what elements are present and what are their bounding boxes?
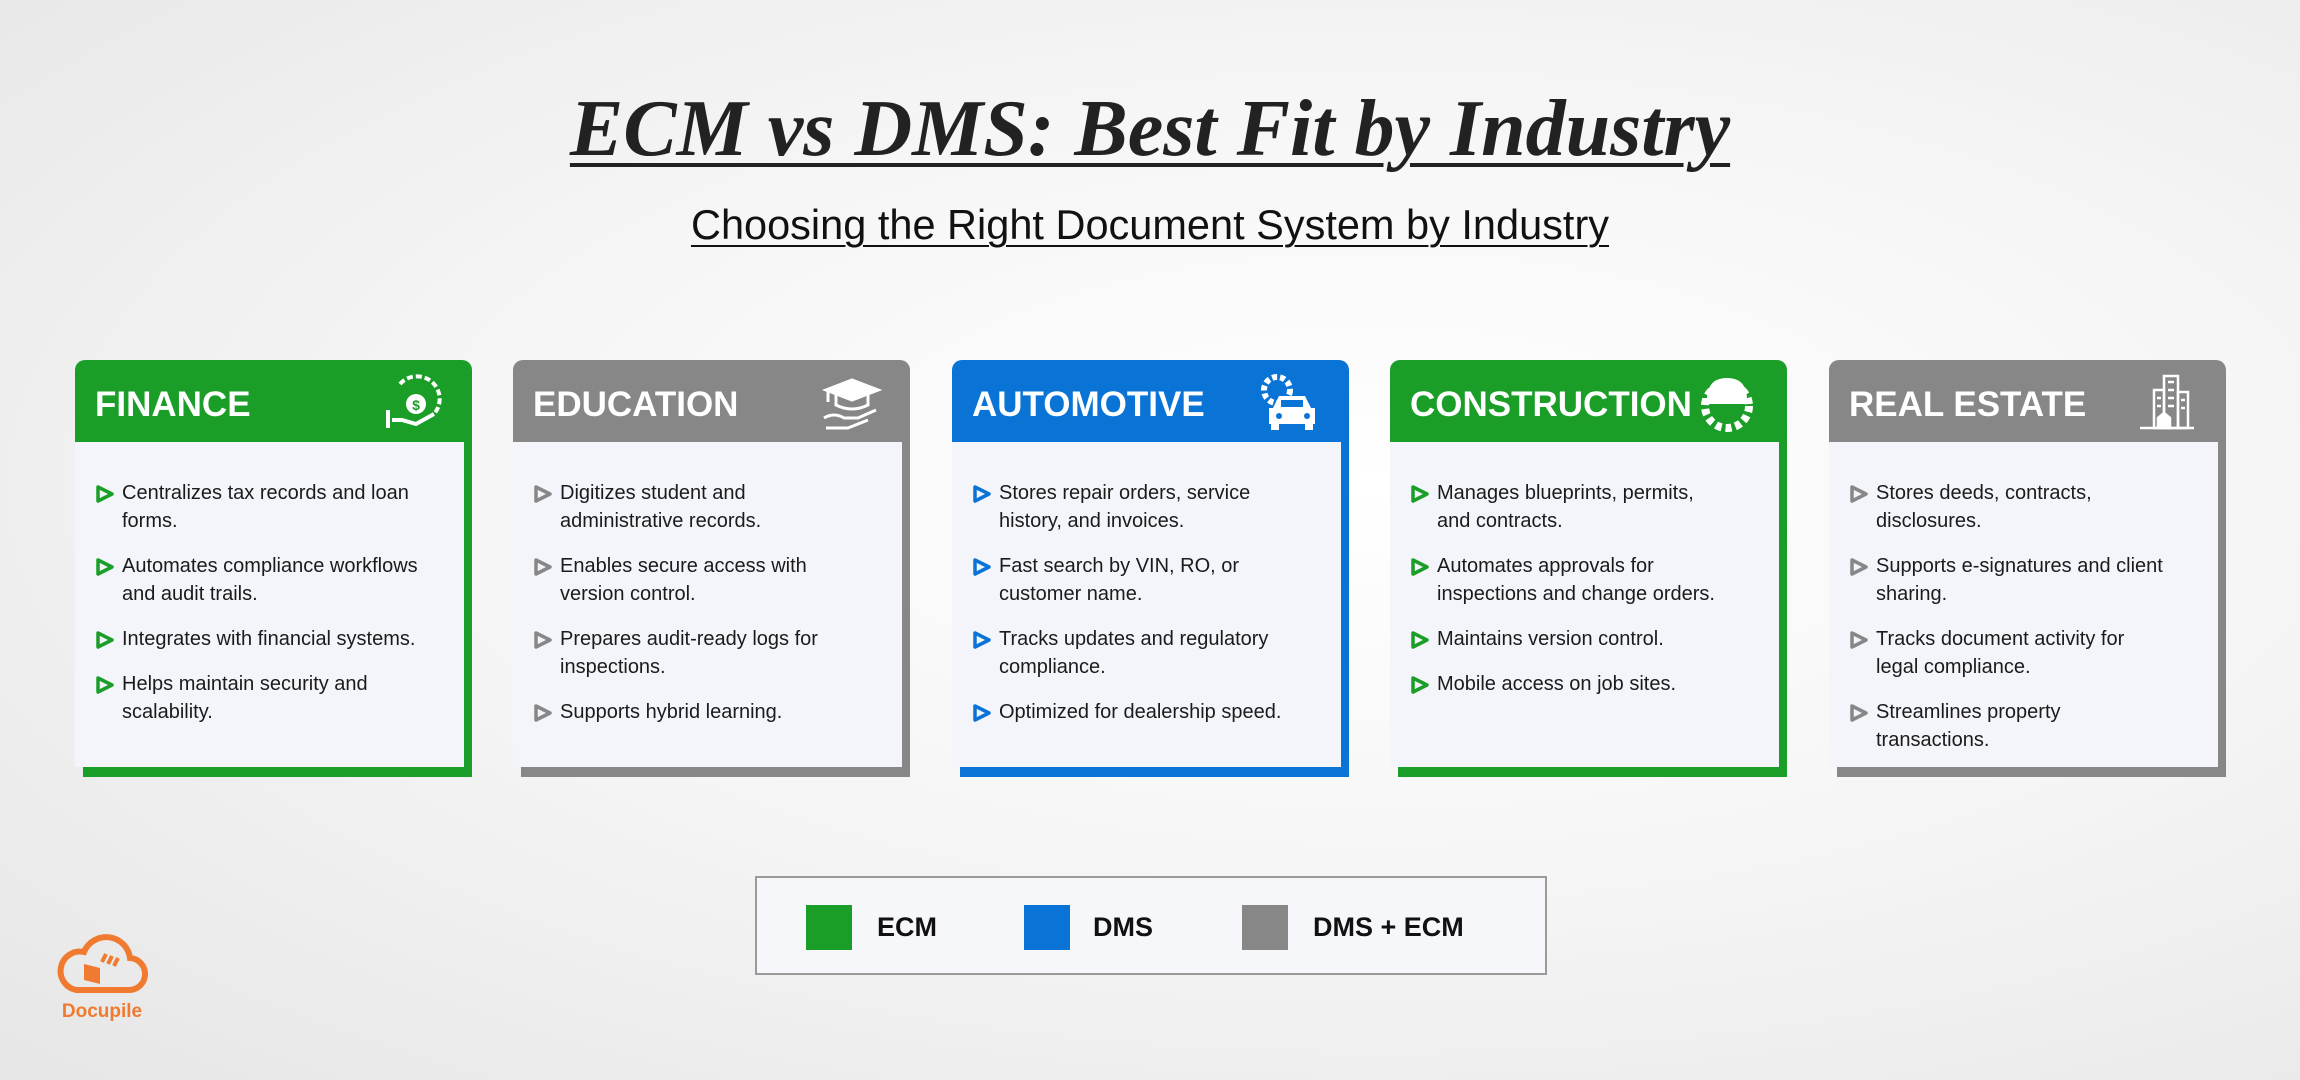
panel: construction <box>1390 360 1787 777</box>
bullets: finance: forms. <box>122 510 178 532</box>
bullets: finance: and audit trails. <box>122 583 258 605</box>
bullets: automotive: Stores repair orders, service <box>999 482 1250 504</box>
panel: finance <box>75 360 472 777</box>
subtitle: Choosing the Right Document System by Industry <box>691 201 1609 248</box>
icon: money hand gear <box>386 374 442 428</box>
logo: docupile: Docupile <box>62 1001 142 1022</box>
bullets: education: Enables secure access with <box>560 555 807 577</box>
bullets: finance: scalability. <box>122 701 213 723</box>
bullets: automotive: history, and invoices. <box>999 510 1184 532</box>
header: construction <box>1390 360 1787 442</box>
bullets: finance: Automates compliance workflows <box>122 555 418 577</box>
bullets: construction: and contracts. <box>1437 510 1563 532</box>
bullets: education: Prepares audit-ready logs for <box>560 628 818 650</box>
bullets: automotive: Optimized for dealership speed. <box>999 701 1281 723</box>
header: real estate: REAL ESTATE <box>1849 385 2086 424</box>
bullets: real estate: sharing. <box>1876 583 1947 605</box>
bullets: finance: Integrates with financial systems. <box>122 628 415 650</box>
bullets: construction: Mobile access on job sites. <box>1437 673 1676 695</box>
panel: automotive <box>952 360 1349 777</box>
legend: DMS <box>1093 912 1153 942</box>
bullets: automotive <box>952 442 1341 767</box>
bullets: education: version control. <box>560 583 696 605</box>
header: construction: CONSTRUCTION <box>1410 385 1692 424</box>
bullets: education: inspections. <box>560 656 666 678</box>
bullets: finance: Helps maintain security and <box>122 673 368 695</box>
bullets: real estate: legal compliance. <box>1876 656 2031 678</box>
bullets: construction: Manages blueprints, permits, <box>1437 482 1694 504</box>
header: automotive: AUTOMOTIVE <box>972 385 1205 424</box>
header: education <box>513 360 910 442</box>
bullets: education: Supports hybrid learning. <box>560 701 782 723</box>
icon: buildings <box>2140 374 2194 430</box>
bullets: real estate <box>1829 442 2218 767</box>
header: automotive <box>952 360 1349 442</box>
bullets: automotive: Fast search by VIN, RO, or <box>999 555 1239 577</box>
icon: graduation cap hand <box>822 378 882 430</box>
bullets: construction: Maintains version control. <box>1437 628 1664 650</box>
bullets: automotive: compliance. <box>999 656 1106 678</box>
bullets: finance <box>75 442 464 767</box>
legend: DMS + ECM <box>1313 912 1464 942</box>
bullets: automotive: Tracks updates and regulatory <box>999 628 1268 650</box>
header: real estate <box>1829 360 2226 442</box>
bullets: education: administrative records. <box>560 510 761 532</box>
bullets: finance: Centralizes tax records and loan <box>122 482 409 504</box>
icon: car gear <box>1261 374 1315 430</box>
header: finance: FINANCE <box>95 385 251 424</box>
bullets: education: Digitizes student and <box>560 482 746 504</box>
bullets: real estate: Streamlines property <box>1876 701 2061 723</box>
bullets: real estate: Stores deeds, contracts, <box>1876 482 2092 504</box>
legend <box>755 876 1547 975</box>
panel: real estate <box>1829 360 2226 777</box>
bullets: automotive: customer name. <box>999 583 1142 605</box>
logo: docupile <box>58 934 148 1022</box>
bullets: education <box>513 442 902 767</box>
icon: money hand gear: $ <box>412 397 420 413</box>
bullets: construction <box>1390 442 1779 767</box>
icon: hard hat gear <box>1701 378 1753 432</box>
header: education: EDUCATION <box>533 385 738 424</box>
bullets: real estate: transactions. <box>1876 729 1989 751</box>
bullets: construction: Automates approvals for <box>1437 555 1654 577</box>
bullets: real estate: disclosures. <box>1876 510 1982 532</box>
panel: education <box>513 360 910 777</box>
bullets: real estate: Supports e-signatures and client <box>1876 555 2163 577</box>
bullets: real estate: Tracks document activity for <box>1876 628 2124 650</box>
title: ECM vs DMS: Best Fit by Industry <box>570 85 1730 173</box>
header: finance <box>75 360 472 442</box>
bullets: construction: inspections and change orders. <box>1437 583 1715 605</box>
legend: ECM <box>877 912 937 942</box>
